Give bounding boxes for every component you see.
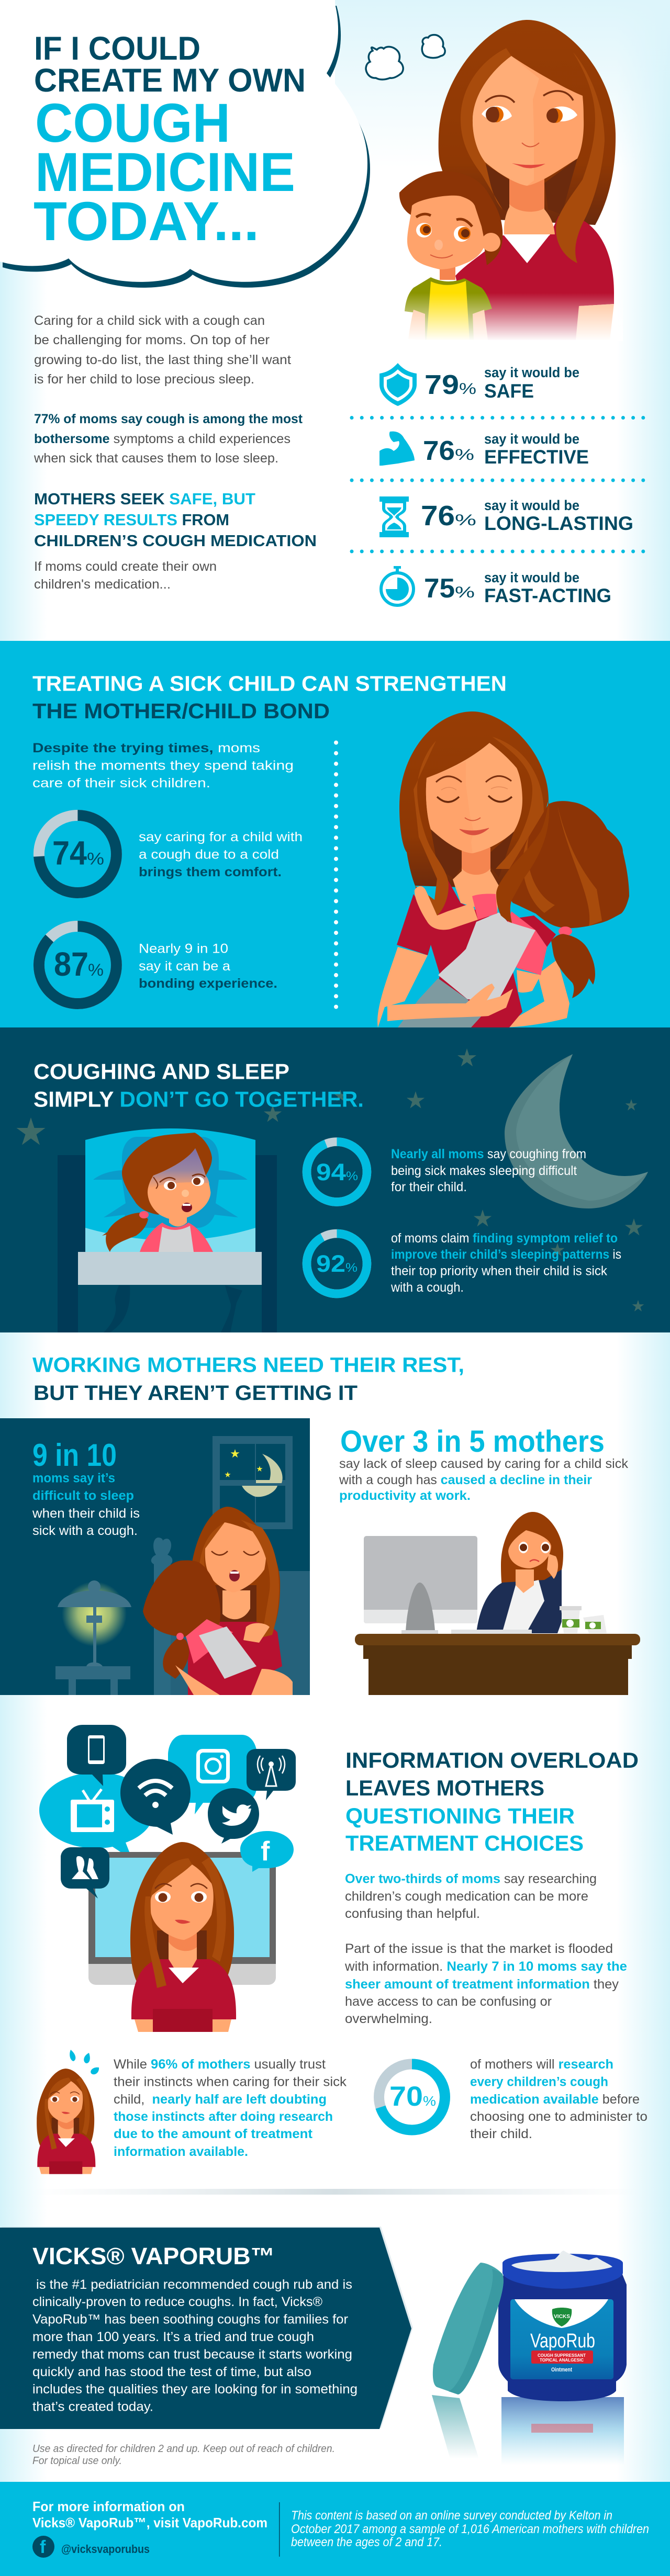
face bbox=[426, 743, 522, 853]
jar body bbox=[498, 2273, 627, 2401]
donut: 92% bbox=[307, 1234, 367, 1294]
sweater bbox=[455, 216, 614, 340]
lead-in text: children's medication... bbox=[34, 577, 171, 592]
product: vaporub jar: VapoRub bbox=[530, 2330, 595, 2352]
heading: safe but speedy bbox=[34, 490, 317, 550]
icon: hourglass bbox=[379, 496, 409, 537]
heading: safe but speedy: MOTHERS SEEK SAFE, BUT bbox=[34, 490, 255, 508]
sky gradient bbox=[335, 0, 670, 167]
smile bbox=[460, 828, 489, 835]
stat: fast-acting bbox=[381, 566, 611, 606]
heading: safe but speedy: CHILDREN’S COUGH MEDICATION bbox=[34, 532, 317, 550]
disclaimer: Use as directed for children 2 and up. Keep out of reach of children. bbox=[32, 2443, 335, 2455]
soft divider bbox=[31, 2189, 639, 2195]
over 3 in 5 text: Over 3 in 5 mothers bbox=[340, 1425, 605, 1459]
donut: 92%: % bbox=[345, 1261, 358, 1275]
donut: 70% bbox=[379, 2064, 445, 2130]
twitter bubble bbox=[208, 1788, 259, 1844]
donut: 70%: 70 bbox=[389, 2081, 423, 2112]
text: trust instincts: their instincts when caring for their sick bbox=[114, 2075, 347, 2089]
illustration: social media overload bbox=[39, 1725, 296, 2032]
people bubble bbox=[61, 1847, 109, 1899]
hair front strand bbox=[556, 52, 605, 263]
stat: effective: say it would be bbox=[484, 431, 579, 447]
pink sleeve bbox=[472, 894, 497, 920]
office woman bbox=[476, 1512, 563, 1633]
survey note: This content is based on an online survey conducted by Kelton in bbox=[291, 2509, 612, 2523]
ponytail bbox=[551, 934, 595, 998]
donut: 87% bbox=[39, 926, 116, 1003]
stat: long-lasting: % bbox=[455, 512, 476, 529]
heading: bond: THE MOTHER/CHILD BOND bbox=[32, 699, 330, 723]
stat: fast-acting: % bbox=[455, 584, 475, 601]
face details bbox=[164, 1181, 176, 1190]
arm bbox=[576, 304, 614, 340]
woman bbox=[130, 1842, 236, 2032]
desk bbox=[355, 1634, 640, 1695]
title bbox=[34, 30, 306, 252]
donut: 70%: % bbox=[423, 2093, 436, 2109]
heading: bond: TREATING A SICK CHILD CAN STRENGTHEN bbox=[32, 672, 507, 696]
mother hair back bbox=[399, 711, 549, 889]
left strand bbox=[414, 741, 449, 921]
mother and child asleep bbox=[143, 1507, 293, 1695]
legs bbox=[104, 1285, 242, 1332]
9 in 10 text: difficult to sleep bbox=[32, 1488, 134, 1503]
stat: safe: say it would be bbox=[484, 365, 579, 380]
panel: vicks vaporub: clinically-proven to reduce coughs. In fact, Vicks® bbox=[32, 2295, 323, 2309]
illustration: tired woman at desk bbox=[355, 1512, 640, 1695]
text: trust instincts: information available. bbox=[114, 2144, 248, 2159]
product: vaporub jar: TOPICAL ANALGESIC bbox=[540, 2358, 584, 2363]
text: market flooded: Part of the issue is that the market is flooded bbox=[345, 1941, 613, 1956]
panel: vicks vaporub bbox=[0, 2227, 413, 2429]
text: comfort: brings them comfort. bbox=[139, 865, 282, 879]
panel: vicks vaporub: includes the qualities they are looking for in something bbox=[32, 2382, 358, 2397]
dotted divider bbox=[352, 478, 646, 482]
text: sleeping difficult: Nearly all moms say coughing from bbox=[391, 1147, 586, 1161]
son bbox=[399, 171, 502, 340]
window bbox=[213, 1436, 293, 1529]
dark under hair bbox=[431, 829, 514, 878]
product: vaporub jar: Ointment bbox=[551, 2367, 572, 2373]
label bbox=[510, 2299, 613, 2379]
heading: information overload: INFORMATION OVERLOAD bbox=[345, 1748, 639, 1772]
footer links: Vicks® VapoRub™, visit VapoRub.com bbox=[32, 2515, 267, 2530]
right strand light bbox=[492, 737, 544, 869]
icon: stopwatch bbox=[381, 566, 414, 605]
stat: effective: EFFECTIVE bbox=[484, 446, 589, 468]
donut: 92%: 92 bbox=[316, 1250, 345, 1277]
intro paragraph: is for her child to lose precious sleep. bbox=[34, 372, 254, 387]
blanket bbox=[78, 1252, 262, 1285]
icon: facebook: f bbox=[40, 2537, 46, 2557]
hair band bbox=[559, 927, 572, 936]
coffee cups bbox=[560, 1606, 607, 1633]
text: two-thirds: confusing than helpful. bbox=[345, 1906, 480, 1921]
title: MEDICINE bbox=[35, 142, 295, 203]
bed post bbox=[151, 1538, 172, 1695]
lead-in text bbox=[34, 559, 217, 592]
icon: shield bbox=[379, 363, 417, 406]
sheet bbox=[85, 1228, 255, 1252]
intro paragraph: Caring for a child sick with a cough can bbox=[34, 313, 265, 328]
stat: safe: 79 bbox=[425, 370, 459, 400]
text: symptom relief: of moms claim finding symptom relief to bbox=[391, 1231, 618, 1246]
stat: fast-acting: FAST-ACTING bbox=[484, 585, 611, 606]
heading: information overload: LEAVES MOTHERS bbox=[345, 1776, 544, 1800]
mother hair back bbox=[439, 20, 616, 225]
neck bbox=[169, 1216, 187, 1226]
stat: fast-acting: 75 bbox=[424, 573, 455, 604]
title: COUGH bbox=[35, 93, 230, 154]
stat: long-lasting: 76 bbox=[421, 500, 455, 532]
over 3 in 5 text: productivity at work. bbox=[339, 1488, 471, 1503]
intro paragraph bbox=[34, 313, 291, 387]
wall panel bbox=[158, 1571, 310, 1695]
footer links bbox=[32, 2499, 267, 2530]
text: trust instincts bbox=[114, 2057, 347, 2159]
text: research every: choosing one to administer to bbox=[470, 2109, 647, 2124]
stat: long-lasting: LONG-LASTING bbox=[484, 513, 633, 534]
dotted divider bbox=[352, 416, 646, 420]
text: symptom relief bbox=[390, 1231, 621, 1295]
text: research every: of mothers will research bbox=[470, 2057, 613, 2072]
text: comfort: say caring for a child with bbox=[139, 830, 303, 844]
stars bbox=[16, 1048, 644, 1312]
text: bonding: bonding experience. bbox=[139, 976, 277, 991]
text: trust instincts: those instincts after doing research bbox=[114, 2109, 333, 2124]
text: research every: their child. bbox=[470, 2127, 532, 2141]
text: trust instincts: While 96% of mothers usually trust bbox=[114, 2057, 326, 2072]
jar rim bbox=[502, 2254, 623, 2289]
facebook bubble: f bbox=[261, 1836, 270, 1867]
9 in 10 text bbox=[32, 1438, 140, 1538]
donut: 74%: % bbox=[87, 850, 104, 868]
monitor bbox=[364, 1536, 477, 1634]
heading: coughing and sleep: SIMPLY DON’T GO TOGETHER. bbox=[34, 1087, 364, 1111]
panel: vicks vaporub: VapoRub™ has been soothing coughs for families for bbox=[32, 2312, 348, 2327]
text: research every bbox=[470, 2057, 647, 2141]
text: sleeping difficult: for their child. bbox=[391, 1180, 467, 1194]
stat: fast-acting: say it would be bbox=[484, 570, 579, 585]
dotted vertical divider bbox=[334, 743, 338, 1008]
wifi bubble bbox=[120, 1759, 191, 1835]
9 in 10 text: sick with a cough. bbox=[32, 1523, 138, 1538]
text: market flooded bbox=[344, 1941, 627, 2026]
panel: footer bbox=[0, 2482, 670, 2576]
heading: coughing and sleep bbox=[34, 1059, 364, 1111]
headboard bbox=[85, 1128, 255, 1252]
stat: safe bbox=[379, 363, 579, 406]
red top bbox=[397, 879, 556, 1027]
text: symptom relief: improve their child’s sleeping patterns is bbox=[391, 1247, 621, 1262]
text: bonding: say it can be a bbox=[139, 959, 230, 974]
icon: arm bbox=[379, 432, 415, 466]
chest and neck bbox=[453, 848, 499, 913]
illustration: mother and son bbox=[393, 20, 623, 341]
over 3 in 5 text: say lack of sleep caused by caring for a child sick bbox=[339, 1456, 629, 1471]
lead-in text: If moms could create their own bbox=[34, 559, 217, 574]
survey note: between the ages of 2 and 17. bbox=[291, 2535, 442, 2549]
donut: 87%: % bbox=[88, 961, 104, 979]
text: bonding bbox=[139, 942, 277, 991]
disclaimer bbox=[32, 2443, 335, 2467]
footer links: For more information on bbox=[32, 2499, 185, 2514]
bond intro: relish the moments they spend taking bbox=[32, 759, 294, 773]
facebook bubble bbox=[240, 1831, 294, 1872]
footer divider bbox=[279, 2502, 280, 2557]
heading: safe but speedy: SPEEDY RESULTS FROM bbox=[34, 511, 229, 529]
social handle: @vicksvaporubus bbox=[61, 2543, 150, 2556]
77% paragraph bbox=[34, 412, 303, 466]
heading: information overload: QUESTIONING THEIR bbox=[345, 1804, 575, 1828]
intro paragraph: be challenging for moms. On top of her bbox=[34, 333, 270, 347]
crescent moon bbox=[505, 1054, 648, 1208]
panel: vicks vaporub: VICKS® VAPORUB™ bbox=[32, 2243, 275, 2269]
closed eyes bbox=[437, 796, 512, 802]
pillow bbox=[93, 1137, 248, 1228]
panel: vicks vaporub: is the #1 pediatrician recommended cough rub and is bbox=[36, 2277, 352, 2292]
intro paragraph: growing to-do list, the last thing she’ll want bbox=[34, 353, 291, 367]
heading: information overload bbox=[345, 1748, 639, 1855]
cream bbox=[511, 2251, 612, 2272]
product: vaporub jar bbox=[432, 2251, 627, 2465]
fade out bbox=[393, 293, 623, 341]
donut: 94%: 94 bbox=[316, 1159, 346, 1185]
icon: worried woman bbox=[37, 2050, 99, 2174]
child hand bbox=[517, 970, 541, 992]
text: trust instincts: child, nearly half are left doubting bbox=[114, 2092, 327, 2107]
title: TODAY... bbox=[34, 191, 259, 252]
stat: effective: 76 bbox=[423, 436, 455, 466]
stat: long-lasting: say it would be bbox=[484, 498, 579, 513]
panel: vicks vaporub: quickly and has stood the test of time, but also bbox=[32, 2365, 311, 2379]
bed posts bbox=[58, 1155, 85, 1332]
right strand front bbox=[496, 800, 549, 923]
title: IF I COULD bbox=[34, 30, 200, 67]
panel: coughing and sleep bbox=[0, 1027, 670, 1332]
survey note bbox=[291, 2509, 649, 2549]
lower hair shadow bbox=[483, 159, 577, 214]
lid bbox=[433, 2263, 504, 2394]
donut: 74%: 74 bbox=[52, 834, 87, 872]
text: trust instincts: due to the amount of treatment bbox=[114, 2127, 313, 2141]
bond intro: care of their sick children. bbox=[32, 776, 210, 790]
panel: vicks vaporub: more than 100 years. It’s a tried and true cough bbox=[32, 2330, 314, 2344]
neck bbox=[504, 178, 555, 234]
ponytail bbox=[102, 1213, 148, 1252]
thought clouds bbox=[366, 35, 445, 80]
bond intro: Despite the trying times, moms bbox=[32, 741, 260, 755]
9 in 10 text: when their child is bbox=[32, 1506, 140, 1521]
antenna bubble bbox=[247, 1749, 296, 1800]
bed interior bbox=[78, 1285, 262, 1332]
9 in 10 text: moms say it’s bbox=[32, 1471, 115, 1486]
product: vaporub jar: COUGH SUPPRESSANT bbox=[538, 2353, 586, 2358]
child shirt and paper bbox=[508, 911, 547, 975]
bond intro bbox=[32, 741, 294, 790]
icon: facebook bbox=[32, 2536, 54, 2558]
stat: safe: SAFE bbox=[484, 380, 534, 402]
77% paragraph: 77% of moms say cough is among the most bbox=[34, 412, 303, 426]
text: bonding: Nearly 9 in 10 bbox=[139, 942, 228, 956]
speech bubble bbox=[0, 0, 370, 288]
77% paragraph: bothersome symptoms a child experiences bbox=[34, 432, 291, 446]
text: market flooded: sheer amount of treatment information they bbox=[345, 1977, 619, 1992]
keyboard bbox=[451, 1630, 532, 1634]
tv bubble bbox=[39, 1772, 154, 1860]
panel: vicks vaporub: remedy that moms can trust because it starts working bbox=[32, 2347, 352, 2362]
mother hand and arm over bbox=[415, 886, 478, 930]
donut: 74% bbox=[39, 815, 116, 892]
heading: coughing and sleep: COUGHING AND SLEEP bbox=[34, 1059, 289, 1084]
stat: effective bbox=[379, 431, 589, 468]
child hair bbox=[507, 801, 629, 928]
heading: bond bbox=[32, 672, 507, 723]
stat: long-lasting bbox=[379, 496, 633, 537]
text: market flooded: with information. Nearly 7 in 10 moms say the bbox=[344, 1959, 627, 1974]
over 3 in 5 text bbox=[339, 1425, 629, 1503]
far upper arm bbox=[377, 947, 428, 1027]
shirt bbox=[504, 235, 550, 263]
heading: information overload: TREATMENT CHOICES bbox=[345, 1831, 584, 1855]
reflection bbox=[432, 2395, 624, 2465]
illustration: mother hugging child bbox=[377, 711, 629, 1027]
near arm bbox=[387, 984, 513, 1021]
77% paragraph: when sick that causes them to lose sleep. bbox=[34, 451, 278, 466]
text: symptom relief: their top priority when their child is sick bbox=[391, 1264, 607, 1279]
instagram bubble bbox=[168, 1735, 257, 1814]
text: sleeping difficult bbox=[391, 1147, 586, 1194]
hair bbox=[122, 1133, 212, 1215]
face bbox=[473, 56, 584, 186]
text: two-thirds: children’s cough medication can be more bbox=[345, 1889, 588, 1904]
heading: working mothers bbox=[32, 1354, 464, 1405]
text: research every: medication available before bbox=[470, 2092, 640, 2107]
text: market flooded: overwhelming. bbox=[345, 2012, 432, 2026]
panel: mother/child bond bbox=[0, 641, 670, 1027]
mother eyes bbox=[482, 106, 512, 121]
text: comfort bbox=[139, 830, 303, 879]
title: CREATE MY OWN bbox=[34, 62, 306, 99]
9 in 10 text: 9 in 10 bbox=[32, 1438, 117, 1473]
donut: 94%: % bbox=[346, 1169, 358, 1183]
product: vaporub jar: VICKS bbox=[554, 2314, 570, 2320]
over 3 in 5 text: with a cough has caused a decline in their bbox=[339, 1473, 592, 1487]
text: symptom relief: with a cough. bbox=[390, 1280, 464, 1295]
heading: working mothers: BUT THEY AREN’T GETTING IT bbox=[34, 1382, 358, 1405]
phone bubble bbox=[67, 1725, 126, 1786]
text: market flooded: have access to can be confusing or bbox=[345, 1994, 552, 2009]
donut: 87%: 87 bbox=[54, 945, 88, 983]
shirt bbox=[140, 1223, 213, 1252]
text: two-thirds: Over two-thirds of moms say researching bbox=[345, 1872, 597, 1886]
illustration: girl in bed bbox=[58, 1128, 277, 1332]
text: two-thirds bbox=[345, 1872, 597, 1921]
disclaimer: For topical use only. bbox=[32, 2455, 122, 2467]
panel: vicks vaporub: that’s created today. bbox=[32, 2399, 153, 2414]
face bbox=[148, 1148, 210, 1220]
text: sleeping difficult: being sick makes sleeping difficult bbox=[391, 1163, 577, 1178]
donut: 94% bbox=[307, 1142, 367, 1202]
heading: working mothers: WORKING MOTHERS NEED THEIR REST, bbox=[32, 1354, 464, 1377]
mother far arm bbox=[499, 959, 570, 1027]
dotted divider bbox=[352, 549, 646, 553]
stat: safe: % bbox=[459, 380, 476, 398]
panel: 9 in 10 bbox=[0, 1418, 310, 1695]
stat: effective: % bbox=[455, 446, 474, 464]
text: research every: every children’s cough bbox=[470, 2075, 608, 2089]
hair inner lighter bbox=[461, 48, 511, 209]
text: comfort: a cough due to a cold bbox=[139, 848, 279, 862]
lamp bbox=[55, 1580, 131, 1695]
monitor bbox=[88, 1852, 276, 1985]
